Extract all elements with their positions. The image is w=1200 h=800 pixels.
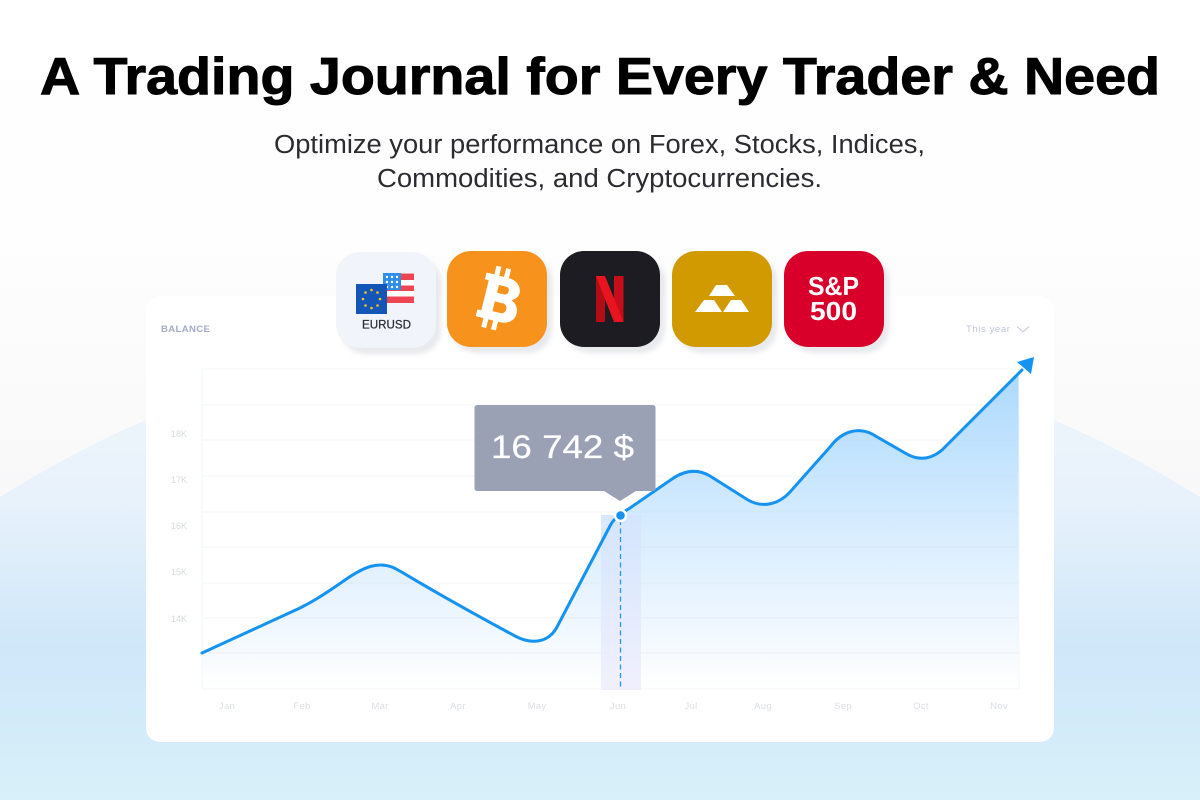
panel: balance chart card [146,296,1054,742]
x axis labels: Jan [219,701,235,712]
area under line [202,372,1019,689]
y axis labels: 17K [171,475,187,485]
tooltip: 16 742 $ [491,429,634,465]
US flag [383,273,414,303]
subtitle [274,131,925,193]
x axis labels [219,701,1008,712]
x axis labels: Oct [913,701,929,712]
y axis labels: 15K [171,567,187,577]
y axis labels: 18K [171,429,187,439]
EU flag [356,284,387,314]
arrow head [1017,357,1034,374]
y axis labels: 14K [171,614,187,624]
x axis labels: Jul [684,701,698,712]
icon: gold bars [672,251,772,347]
background dome [0,325,1200,800]
data point [615,510,626,521]
x axis labels: Aug [754,701,772,712]
y axis labels [171,429,187,624]
x axis labels: Nov [990,701,1008,712]
subtitle: Optimize your performance on Forex, Stocks, Indices, [274,131,925,159]
x axis labels: May [528,701,546,712]
icon: S&P 500: S&P [808,273,859,301]
dashed marker: June [620,520,622,688]
x axis labels: Feb [293,701,311,712]
icon: S&P 500: 500 [810,298,857,326]
period selector: This year [966,324,1010,335]
icon: Bitcoin [447,251,547,347]
icon: Netflix [560,251,660,347]
highlight band: June [601,515,641,690]
grid lines [202,369,1019,689]
tooltip [474,405,656,501]
x axis labels: Apr [450,701,466,712]
title: A Trading Journal for Every Trader & Need [40,48,1160,106]
icon: EURUSD: EURUSD [362,318,411,332]
x axis labels: Mar [371,701,389,712]
subtitle: Commodities, and Cryptocurrencies. [377,165,822,193]
y axis labels: 16K [171,521,187,531]
icon: EURUSD [336,252,436,348]
card heading: balance: BALANCE [161,324,210,335]
balance line [202,370,1022,653]
x axis labels: Jun [610,701,626,712]
x axis labels: Sep [834,701,852,712]
icon: S&P 500 [784,251,884,347]
